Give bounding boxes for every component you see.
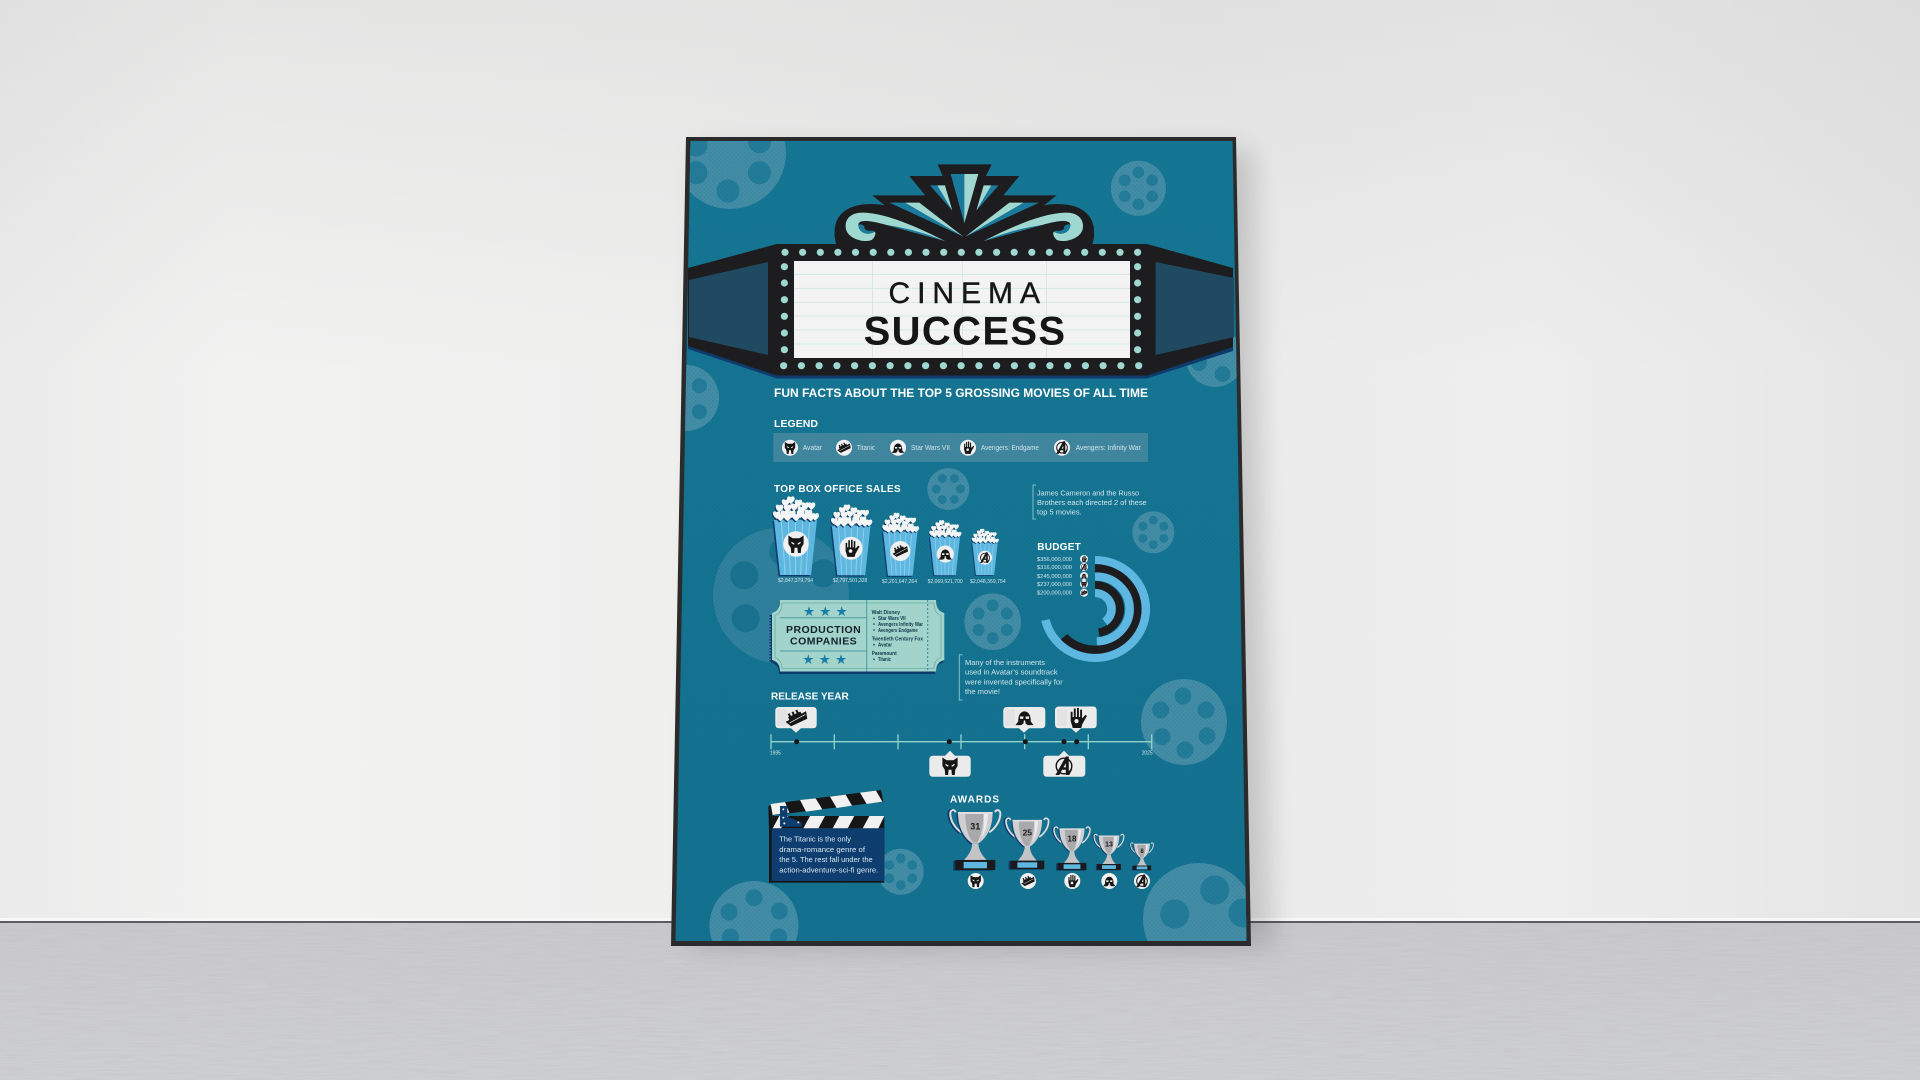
ticket company list: Twentieth Century Fox — [872, 636, 923, 642]
ticket heading: PRODUCTION — [786, 624, 861, 636]
popcorn: avatar: $2,847,379,794 — [778, 578, 813, 584]
legend item: endgame — [960, 440, 1039, 456]
clapper text: The Titanic is the only — [779, 834, 851, 844]
trophy: endgame 18: 18 — [1068, 835, 1077, 844]
ticket company list: Walt Disney — [872, 610, 900, 616]
right wing panel — [1156, 262, 1234, 355]
chart: release year timeline — [770, 706, 1153, 777]
poster frame — [671, 137, 1251, 946]
ticket heading: COMPANIES — [790, 636, 857, 648]
popcorn: infinity war: $2,048,359,754 — [970, 579, 1006, 585]
marquee — [688, 164, 1234, 378]
budget ring values: $200,000,000 — [1037, 590, 1072, 596]
trophy: infinity war 8: 8 — [1140, 849, 1144, 855]
trophy: endgame 18 — [1053, 827, 1090, 889]
heading: awards: AWARDS — [950, 795, 999, 806]
ticket heading — [786, 624, 861, 648]
budget ring values: $237,000,000 — [1037, 582, 1072, 588]
chart: release year timeline: 1995 — [770, 750, 781, 756]
reel: right under marquee — [1187, 336, 1237, 387]
ticket company list: Paramount — [872, 651, 897, 657]
legend item: titanic: Titanic — [857, 445, 875, 452]
heading: top box office sales: TOP BOX OFFICE SALES — [774, 484, 901, 495]
marquee crown — [835, 164, 1094, 247]
ticket stars: ★ — [803, 604, 815, 619]
panel: clapperboard — [768, 790, 884, 883]
trophy: infinity war 8 — [1130, 843, 1153, 889]
callout: avatar soundtrack — [959, 655, 1063, 700]
popcorn: endgame: $2,797,501,328 — [833, 578, 868, 584]
ticket company list — [872, 610, 923, 663]
legend item: avatar — [782, 440, 823, 456]
callout: directors: James Cameron and the Russo — [1037, 490, 1139, 498]
callout: avatar soundtrack: used in Avatar’s soundtrack — [965, 670, 1058, 676]
reel: top left — [690, 141, 786, 209]
bubble: avatar — [929, 751, 971, 777]
ticket company list: Star Wars VII — [878, 616, 906, 622]
ticket company list: Avengers Infinity War — [878, 622, 923, 628]
panel: production companies ticket — [770, 600, 944, 674]
callout: directors: Brothers each directed 2 of these — [1037, 500, 1147, 507]
reel: above budget note — [927, 468, 970, 510]
budget ring values: $245,000,000 — [1037, 574, 1072, 580]
title: cinema: CINEMA — [888, 277, 1040, 310]
ticket stars: ★ — [819, 604, 831, 619]
trophy: star wars 13 — [1093, 834, 1124, 889]
heading: legend: LEGEND — [774, 418, 818, 430]
reel: right of note — [1132, 511, 1174, 553]
popcorn: star wars — [928, 520, 963, 585]
ticket stars: ★ — [802, 652, 814, 667]
chart: budget radial — [1037, 555, 1146, 658]
floor — [0, 921, 1920, 1080]
bubble: star wars — [1003, 707, 1045, 733]
reel: behind clapperboard — [878, 849, 924, 895]
chart: awards trophies — [949, 810, 1153, 889]
callout: directors: top 5 movies. — [1037, 510, 1082, 516]
budget ring icons — [1080, 555, 1088, 597]
chart: popcorn box office — [772, 496, 1006, 585]
marquee sign — [794, 261, 1130, 358]
popcorn: infinity war — [970, 529, 1006, 585]
poster — [676, 141, 1246, 941]
callout: avatar soundtrack: the movie! — [965, 689, 1000, 696]
subtitle: FUN FACTS ABOUT THE TOP 5 GROSSING MOVIES OF ALL TIME — [774, 386, 1148, 400]
popcorn: titanic: $2,201,647,264 — [882, 579, 917, 585]
clapper artwork — [768, 790, 884, 883]
popcorn: avatar — [772, 496, 819, 584]
ticket stars: ★ — [819, 652, 831, 667]
ticket company list: Titanic — [878, 657, 891, 663]
budget ring values: $356,000,000 — [1037, 557, 1072, 563]
trophy: avatar 31 — [949, 810, 1000, 889]
heading: release year: RELEASE YEAR — [771, 692, 849, 702]
bubble: endgame — [1055, 706, 1097, 733]
legend item: titanic — [836, 440, 875, 456]
legend item: infinity war: Avengers: Infinity War — [1076, 445, 1141, 452]
heading: budget: BUDGET — [1037, 542, 1081, 553]
trophy: titanic 25 — [1005, 818, 1049, 889]
clapper text — [779, 834, 878, 874]
popcorn: star wars: $2,069,521,700 — [928, 579, 963, 585]
ticket company list: Avatar — [878, 642, 892, 648]
title: success: SUCCESS — [864, 310, 1065, 354]
ticket stars: ★ — [836, 604, 848, 619]
bubble: infinity war — [1043, 751, 1085, 777]
reel: bottom right — [1143, 863, 1246, 941]
reel: left under marquee — [685, 365, 719, 431]
trophy: avatar 31: 31 — [970, 822, 980, 832]
panel: legend — [773, 433, 1148, 462]
trophy: star wars 13: 13 — [1105, 842, 1113, 849]
clapper text: the 5. The rest fall under the — [779, 855, 873, 864]
chart: release year timeline: 2025 — [1142, 750, 1153, 756]
popcorn: titanic — [882, 513, 919, 585]
legend item: star wars: Star Wars VII — [911, 445, 950, 452]
budget rings — [1045, 560, 1146, 658]
reel: right of timeline — [1141, 679, 1227, 765]
legend item: avatar: Avatar — [803, 445, 823, 452]
marquee wings and body — [688, 244, 1234, 378]
reel: bottom left — [710, 881, 798, 941]
callout: directors — [1033, 485, 1147, 519]
poster shadow — [690, 150, 1272, 946]
reel: top right — [1111, 161, 1166, 216]
halftone texture — [670, 135, 1255, 947]
budget ring values — [1037, 557, 1072, 596]
budget ring values: $316,000,000 — [1037, 565, 1072, 571]
reel: centre — [964, 593, 1021, 650]
callout: avatar soundtrack: were invented specifically for — [964, 680, 1063, 686]
ticket stars — [802, 604, 848, 667]
left wing panel — [689, 262, 768, 355]
trophy: titanic 25: 25 — [1023, 827, 1032, 837]
clapper text: action-adventure-sci-fi genre. — [779, 866, 878, 874]
legend item: endgame: Avengers: Endgame — [981, 445, 1039, 452]
legend item: star wars — [890, 440, 950, 456]
reel: large centre left — [713, 528, 849, 664]
bubble: titanic — [775, 706, 817, 733]
callout: avatar soundtrack: Many of the instruments — [965, 660, 1046, 667]
ticket stars: ★ — [835, 652, 847, 667]
ticket company list: Avengers Endgame — [878, 628, 918, 634]
popcorn: endgame — [830, 504, 872, 584]
legend item: infinity war — [1054, 440, 1141, 456]
background film reels — [685, 141, 1246, 941]
marquee lights — [780, 249, 1142, 369]
clapper text: drama-romance genre of — [779, 845, 866, 854]
